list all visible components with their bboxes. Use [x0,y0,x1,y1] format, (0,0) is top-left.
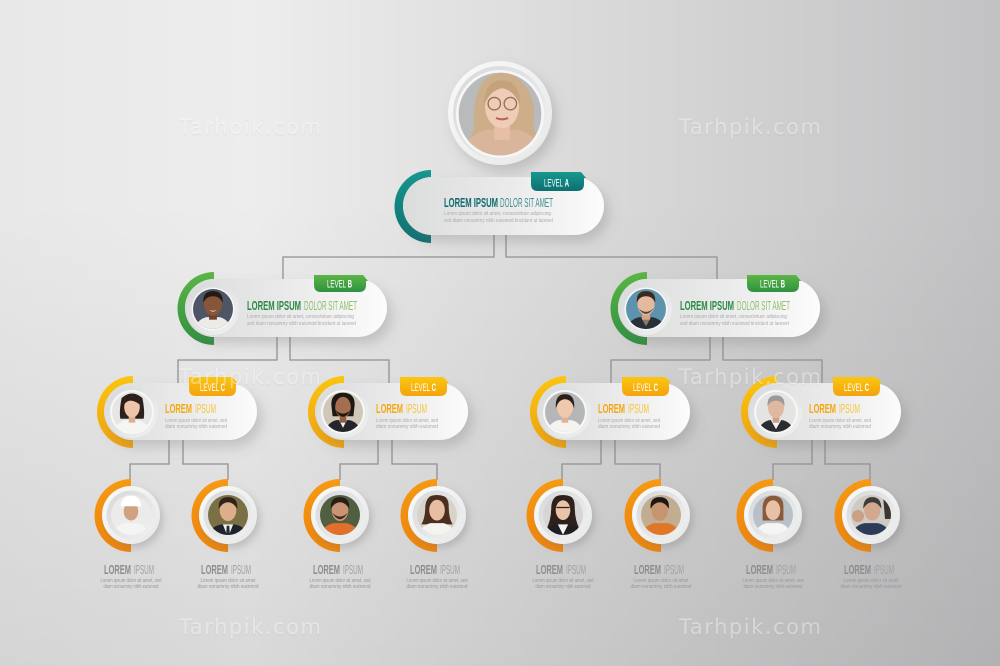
leaf 5: woman with glasses: Lorem ipsum dolor sit amet, sed [532,578,594,584]
connector lines [130,234,870,480]
leaf 6: man in orange polo: LOREM [634,562,661,577]
card: level B right [610,272,820,345]
card: level C 3 [530,376,690,448]
text: level A body: sed diam nonummy nibh euismod tincidunt ut laoreet [444,218,554,224]
text: level C 4 body [809,418,871,430]
heading: level C 4: LOREM [809,401,836,416]
tag: level B left [314,275,368,292]
leaf 2: man in suit: LOREM [201,562,228,577]
watermarks: Tarhpik.com [678,365,821,389]
leaf 1: engineer: LOREM [104,562,131,577]
leaf 8: man in navy shirt: diam nonummy nibh euismod [840,584,902,590]
leaf 4: woman with brown hair: diam nonummy nibh euismod [406,584,468,590]
leaf 1: engineer: Lorem ipsum dolor sit amet, sed [100,578,162,584]
text: level C 1 body: Lorem ipsum dolor sit amet, sed [165,418,227,424]
heading: level B left: LOREM IPSUM [247,298,301,313]
leaf 8: man in navy shirt [834,479,902,590]
card: level C 4 [741,376,901,448]
text: level C 4 body: Lorem ipsum dolor sit amet, sed [809,418,871,424]
leaf 3: man in orange shirt [304,479,371,590]
heading: level A: LOREM IPSUM [444,195,498,210]
arc: level C 2 [308,376,344,448]
arc: level C 4 [741,376,777,448]
tag: level C 3 [622,377,671,396]
leaf 2: man in suit: diam nonummy nibh euismod [198,584,259,590]
tag: level B left: LEVEL B [327,278,352,290]
watermarks [178,115,821,639]
leaf 5: woman with glasses: IPSUM [566,562,586,577]
watermarks: Tarhpik.com [178,365,321,389]
leaf 3: man in orange shirt: IPSUM [343,562,363,577]
leaf 8: man in navy shirt: LOREM [844,562,871,577]
heading: level C 1: LOREM [165,401,192,416]
text: level C 2 body: Lorem ipsum dolor sit amet, sed [376,418,438,424]
tag: level B right: LEVEL B [760,278,785,290]
tag: level C 4 [833,377,882,396]
text: level B left body: sed diam nonummy nibh euismod tincidunt ut laoreet [247,321,357,327]
leaf 1: engineer: diam nonummy nibh euismod [104,584,159,590]
heading: level C 3: LOREM [598,401,625,416]
arc: level B right [610,272,647,345]
leaf 6: man in orange polo: Lorem ipsum dolor sit amet [634,578,689,584]
arc: level C 1 [97,376,133,448]
card body: level B left [185,279,387,337]
text: level C 2 body: diam nonummy nibh euismod [376,424,438,430]
leaf 1: engineer: IPSUM [134,562,154,577]
text: level C 3 body: diam nonummy nibh euismod [598,424,660,430]
card body: level A [403,177,604,235]
leaf 3: man in orange shirt: Lorem ipsum dolor sit amet, sed [310,578,371,584]
text: level B right body: sed diam nonummy nibh euismod tincidunt ut laoreet [680,321,790,327]
text: level C 4 body: diam nonummy nibh euismod [809,424,871,430]
tag: level C 1 [189,377,238,396]
photo: level B left [192,288,238,335]
card body: level C 2 [315,383,468,440]
leaf 8: man in navy shirt: IPSUM [874,562,894,577]
arc: level B left [178,272,214,345]
watermarks: Tarhpik.com [678,615,821,639]
tag: level A [531,172,586,191]
leaf 7: woman in white blouse: LOREM [746,562,773,577]
card body: level B right [618,279,820,337]
leaf 7: woman in white blouse [736,479,804,590]
tag: level C 2: LEVEL C [411,382,436,394]
leaf 7: woman in white blouse: Lorem ipsum dolor sit amet, sed [742,578,804,584]
leaf 6: man in orange polo: IPSUM [664,562,684,577]
card: level B left [178,272,387,345]
photo: level C 3 [543,390,587,438]
tag: level C 2 [400,377,449,396]
photo: level B right [624,288,672,335]
text: level C 1 body: diam nonummy nibh euismod [165,424,227,430]
leaf 3: man in orange shirt: diam nonummy nibh euismod [310,584,371,590]
arc: level C 3 [530,376,566,448]
leaf 5: woman with glasses [526,479,594,590]
leaf 5: woman with glasses: LOREM [536,562,563,577]
leaf 3: man in orange shirt: LOREM [313,562,340,577]
card body: level C 4 [748,383,901,440]
leaf 2: man in suit [192,479,259,590]
heading: level C 4: IPSUM [839,401,860,416]
text: level A body: Lorem ipsum dolor sit amet, consectetuer adipiscing [444,211,551,217]
text: level B left body [247,314,357,327]
leaf 6: man in orange polo [624,479,692,590]
leaf 2: man in suit: Lorem ipsum dolor sit amet [200,578,256,584]
leaf 2: man in suit: IPSUM [231,562,251,577]
text: level C 1 body [165,418,227,430]
card: level B right: DOLOR SIT AMET [737,298,790,313]
photo: level C 2 [321,390,365,438]
card body: level C 3 [537,383,690,440]
leaf 7: woman in white blouse: IPSUM [776,562,796,577]
tag: level A: LEVEL A [544,178,569,190]
leaf 4: woman with brown hair: LOREM [410,562,437,577]
heading: level C 1: IPSUM [195,401,216,416]
photo: level C 1 [110,390,155,438]
leaf 4: woman with brown hair [400,479,468,590]
card: level B left: DOLOR SIT AMET [304,298,357,313]
card body: level C 1 [104,383,257,440]
heading: level C 2: LOREM [376,401,403,416]
leaf 6: man in orange polo: diam nonummy nibh euismod [630,584,692,590]
leaf 8: man in navy shirt: Lorem ipsum dolor sit amet [844,578,899,584]
text: level B right body [680,314,790,327]
watermarks: Tarhpik.com [178,615,321,639]
top portrait: level A person [448,61,554,171]
leaf 4: woman with brown hair: Lorem ipsum dolor sit amet, sed [406,578,468,584]
text: level B left body: Lorem ipsum dolor sit amet, consectetuer adipiscing [247,314,354,320]
heading: level B right: LOREM IPSUM [680,298,734,313]
watermarks: Tarhpik.com [678,115,821,139]
tag: level C 4: LEVEL C [844,382,869,394]
watermarks: Tarhpik.com [178,115,321,139]
tag: level C 1: LEVEL C [200,382,225,394]
tag: level C 3: LEVEL C [633,382,658,394]
heading: level C 3: IPSUM [628,401,649,416]
photo: level C 4 [754,390,798,438]
text: level C 2 body [376,418,438,430]
text: level A body [444,211,554,224]
tag: level B right [747,275,801,292]
leaf 7: woman in white blouse: diam nonummy nibh euismod [744,584,803,590]
card: level C 2 [308,376,468,448]
heading: level C 2: IPSUM [406,401,427,416]
arc: level A teal [394,170,431,243]
text: level C 3 body [598,418,660,430]
leaf 4: woman with brown hair: IPSUM [440,562,460,577]
card: level A [394,170,604,243]
text: level C 3 body: Lorem ipsum dolor sit amet, sed [598,418,660,424]
leaf 5: woman with glasses: diam nonummy nibh euismod [536,584,591,590]
leaf 1: engineer [94,479,162,590]
text: level B right body: Lorem ipsum dolor sit amet, consectetuer adipiscing [680,314,787,320]
card: level A: DOLOR SIT AMET [500,195,553,210]
card: level C 1 [97,376,257,448]
